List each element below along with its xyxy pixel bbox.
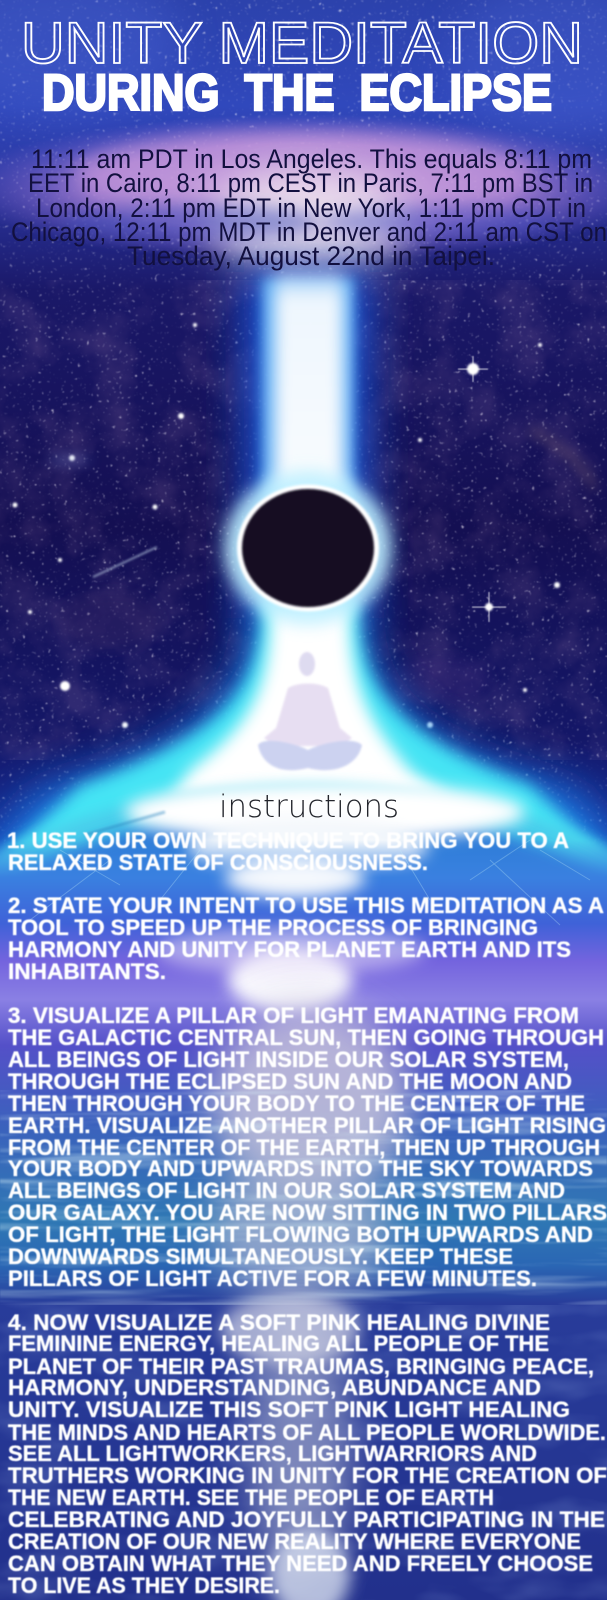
step 3: THROUGH THE ECLIPSED SUN AND THE MOON AND — [8, 1069, 572, 1094]
step 3: OF LIGHT, THE LIGHT FLOWING BOTH UPWARDS AND — [8, 1222, 593, 1247]
step 4: CAN OBTAIN WHAT THEY NEED AND FREELY CHOOSE — [8, 1551, 593, 1576]
subtitle: DURING THE ECLIPSE — [42, 64, 552, 121]
time zone text block: Tuesday, August 22nd in Taipei. — [127, 241, 495, 271]
step 3: YOUR BODY AND UPWARDS INTO THE SKY TOWARDS — [8, 1156, 593, 1181]
step 3: PILLARS OF LIGHT ACTIVE FOR A FEW MINUTES. — [8, 1266, 537, 1291]
step 4: TO LIVE AS THEY DESIRE. — [8, 1573, 280, 1598]
title: UNITY MEDITATION — [21, 11, 583, 76]
step 2: TOOL TO SPEED UP THE PROCESS OF BRINGING — [8, 915, 538, 940]
pillar of light — [244, 262, 370, 618]
step 4: FEMININE ENERGY, HEALING ALL PEOPLE OF THE — [8, 1331, 549, 1356]
step 3: OUR GALAXY. YOU ARE NOW SITTING IN TWO PILLARS — [8, 1200, 607, 1225]
step 4: SEE ALL LIGHTWORKERS, LIGHTWARRIORS AND — [8, 1441, 537, 1466]
step 4: PLANET OF THEIR PAST TRAUMAS, BRINGING PEACE, — [8, 1354, 594, 1379]
step 4: THE NEW EARTH. SEE THE PEOPLE OF EARTH — [8, 1485, 494, 1510]
step 2: INHABITANTS. — [8, 959, 166, 984]
step 4: TRUTHERS WORKING IN UNITY FOR THE CREATION OF — [8, 1463, 607, 1488]
step 4: CREATION OF OUR NEW REALITY WHERE EVERYONE — [8, 1529, 581, 1554]
step 3: ALL BEINGS OF LIGHT IN OUR SOLAR SYSTEM AND — [8, 1178, 565, 1203]
step 3: 3. VISUALIZE A PILLAR OF LIGHT EMANATING FROM — [8, 1003, 579, 1028]
step 3: EARTH. VISUALIZE ANOTHER PILLAR OF LIGHT RISING — [8, 1113, 606, 1138]
step 4: UNITY. VISUALIZE THIS SOFT PINK LIGHT HEALING — [8, 1397, 570, 1422]
lower background: water — [0, 840, 607, 1600]
earth arc — [0, 782, 607, 1236]
step 3: ALL BEINGS OF LIGHT INSIDE OUR SOLAR SYSTEM, — [8, 1047, 569, 1072]
shooting star — [93, 547, 157, 577]
step 1: RELAXED STATE OF CONSCIOUSNESS. — [8, 850, 428, 875]
step 2: 2. STATE YOUR INTENT TO USE THIS MEDITATION AS A — [8, 893, 604, 918]
step 4: CELEBRATING AND JOYFULLY PARTICIPATING IN THE — [8, 1507, 605, 1532]
step 2 — [8, 893, 604, 984]
step 4: 4. NOW VISUALIZE A SOFT PINK HEALING DIVINE — [8, 1310, 550, 1335]
galaxy nebula — [0, 114, 607, 272]
step 4 — [8, 1310, 607, 1598]
step 4: THE MINDS AND HEARTS OF ALL PEOPLE WORLDWIDE. — [8, 1420, 606, 1445]
step 3: THE GALACTIC CENTRAL SUN, THEN GOING THROUGH — [8, 1025, 604, 1050]
distant nebula patches — [48, 430, 595, 704]
step 2: HARMONY AND UNITY FOR PLANET EARTH AND ITS — [8, 937, 571, 962]
step 3: FROM THE CENTER OF THE EARTH, THEN UP THROUGH — [8, 1135, 600, 1160]
eclipse: moon disc — [237, 484, 379, 612]
meditating figure — [258, 652, 362, 770]
stars — [12, 323, 560, 767]
time zone text block — [11, 144, 607, 271]
step 3: THEN THROUGH YOUR BODY TO THE CENTER OF THE — [8, 1091, 585, 1116]
step 4: HARMONY, UNDERSTANDING, ABUNDANCE AND — [8, 1375, 541, 1400]
earth glow — [0, 471, 607, 880]
step 1: 1. USE YOUR OWN TECHNIQUE TO BRING YOU TO A — [7, 828, 569, 853]
instructions heading: instructions — [219, 789, 399, 825]
step 3: DOWNWARDS SIMULTANEOUSLY. KEEP THESE — [8, 1244, 513, 1269]
step 3 — [8, 1003, 607, 1291]
step 1 — [7, 828, 569, 875]
background: starry sky — [0, 0, 607, 880]
